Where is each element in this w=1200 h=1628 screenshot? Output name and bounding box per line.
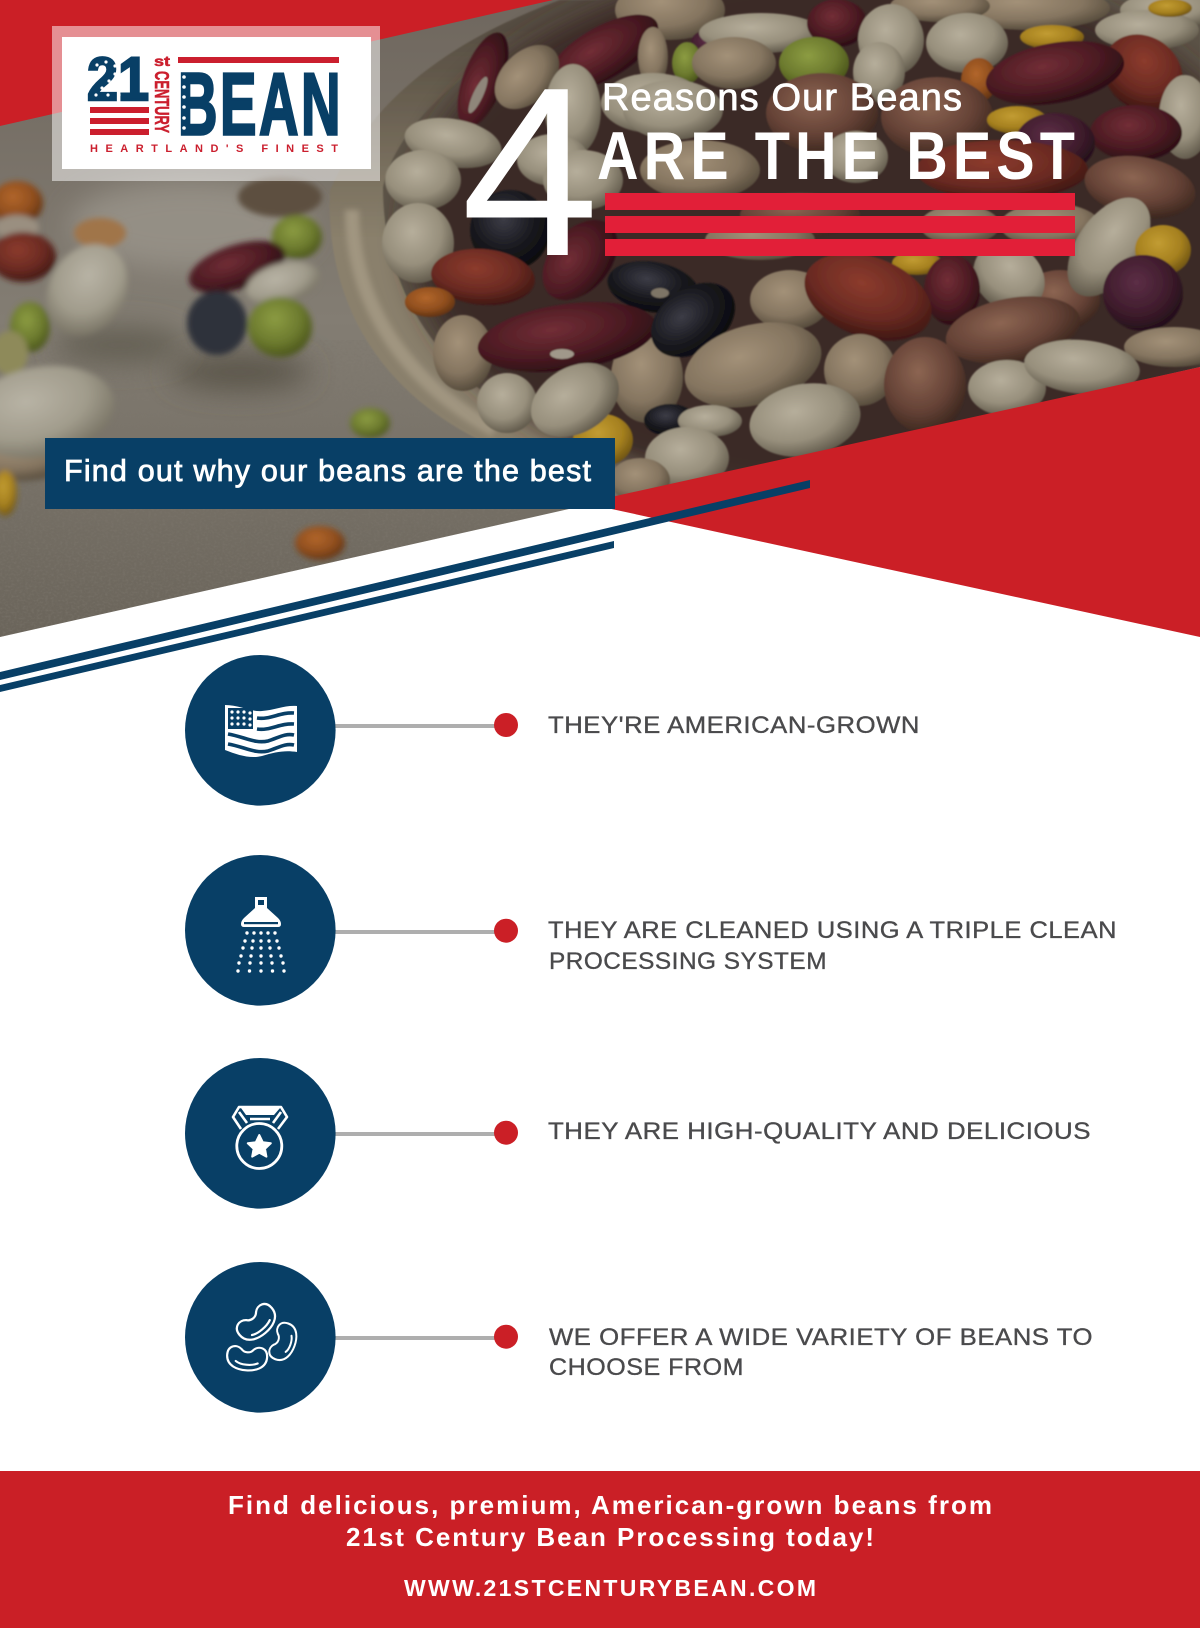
logo: st century: st — [154, 53, 170, 69]
blurred foreground beans on burlap — [0, 177, 390, 560]
logo stripes — [90, 107, 149, 135]
banner: Find out why our beans are the best — [64, 454, 592, 488]
footer url: WWW.21STCENTURYBEAN.COM — [404, 1575, 816, 1601]
logo wordmark BEAN: BEAN — [178, 54, 343, 154]
logo mark: 21: 21 — [87, 45, 149, 113]
banner — [45, 438, 615, 509]
double navy diagonal stripes — [0, 480, 810, 692]
footer message — [228, 1490, 992, 1552]
beans in the bowl — [382, 0, 1200, 502]
logo: st century — [150, 53, 172, 133]
icon: flag — [225, 705, 297, 757]
logo bar — [178, 57, 339, 63]
logo tagline: HEARTLAND'S FINEST — [90, 143, 338, 155]
label — [548, 917, 1117, 975]
label: WE OFFER A WIDE VARIETY OF BEANS TO — [549, 1324, 1093, 1351]
red triangle right — [584, 367, 1200, 637]
background photo: mixed beans in a wooden bowl — [0, 0, 1200, 640]
connector — [335, 724, 500, 728]
logo panel — [52, 26, 380, 181]
dot — [494, 919, 518, 943]
title red stripes — [605, 193, 1075, 256]
label: THEY ARE HIGH-QUALITY AND DELICIOUS — [548, 1118, 1091, 1145]
item 3: high quality — [185, 1058, 1091, 1209]
label — [549, 1324, 1093, 1381]
footer message: 21st Century Bean Processing today! — [346, 1522, 874, 1552]
item 2: triple clean — [185, 855, 1117, 1006]
icon: shower head — [238, 897, 284, 971]
circle — [185, 855, 336, 1006]
connector — [335, 1132, 500, 1136]
dot — [494, 1121, 518, 1145]
connector — [335, 930, 500, 934]
circle — [185, 1262, 336, 1413]
dot — [494, 713, 518, 737]
red corner triangle top-left — [0, 0, 553, 126]
footer message: Find delicious, premium, American-grown beans from — [228, 1490, 992, 1520]
icon: medal — [233, 1107, 287, 1168]
title — [461, 38, 1080, 307]
connector — [335, 1336, 500, 1340]
label: PROCESSING SYSTEM — [549, 948, 827, 975]
dot — [494, 1325, 518, 1349]
big numeral 4: 4 — [461, 38, 599, 307]
label: THEY ARE CLEANED USING A TRIPLE CLEAN — [548, 917, 1117, 944]
item 4: wide variety — [185, 1262, 1093, 1413]
footer — [0, 1471, 1200, 1628]
circle — [185, 1058, 336, 1209]
item 1: American-grown — [185, 655, 920, 806]
label: THEY'RE AMERICAN-GROWN — [548, 712, 920, 739]
title line one: Reasons Our Beans — [602, 77, 962, 119]
icon: beans — [226, 1301, 301, 1372]
label: CHOOSE FROM — [549, 1354, 744, 1381]
logo wordmark BEAN — [178, 54, 343, 154]
logo: st century: CENTURY — [150, 71, 172, 133]
circle — [185, 655, 336, 806]
title line two: ARE THE BEST — [597, 118, 1080, 194]
